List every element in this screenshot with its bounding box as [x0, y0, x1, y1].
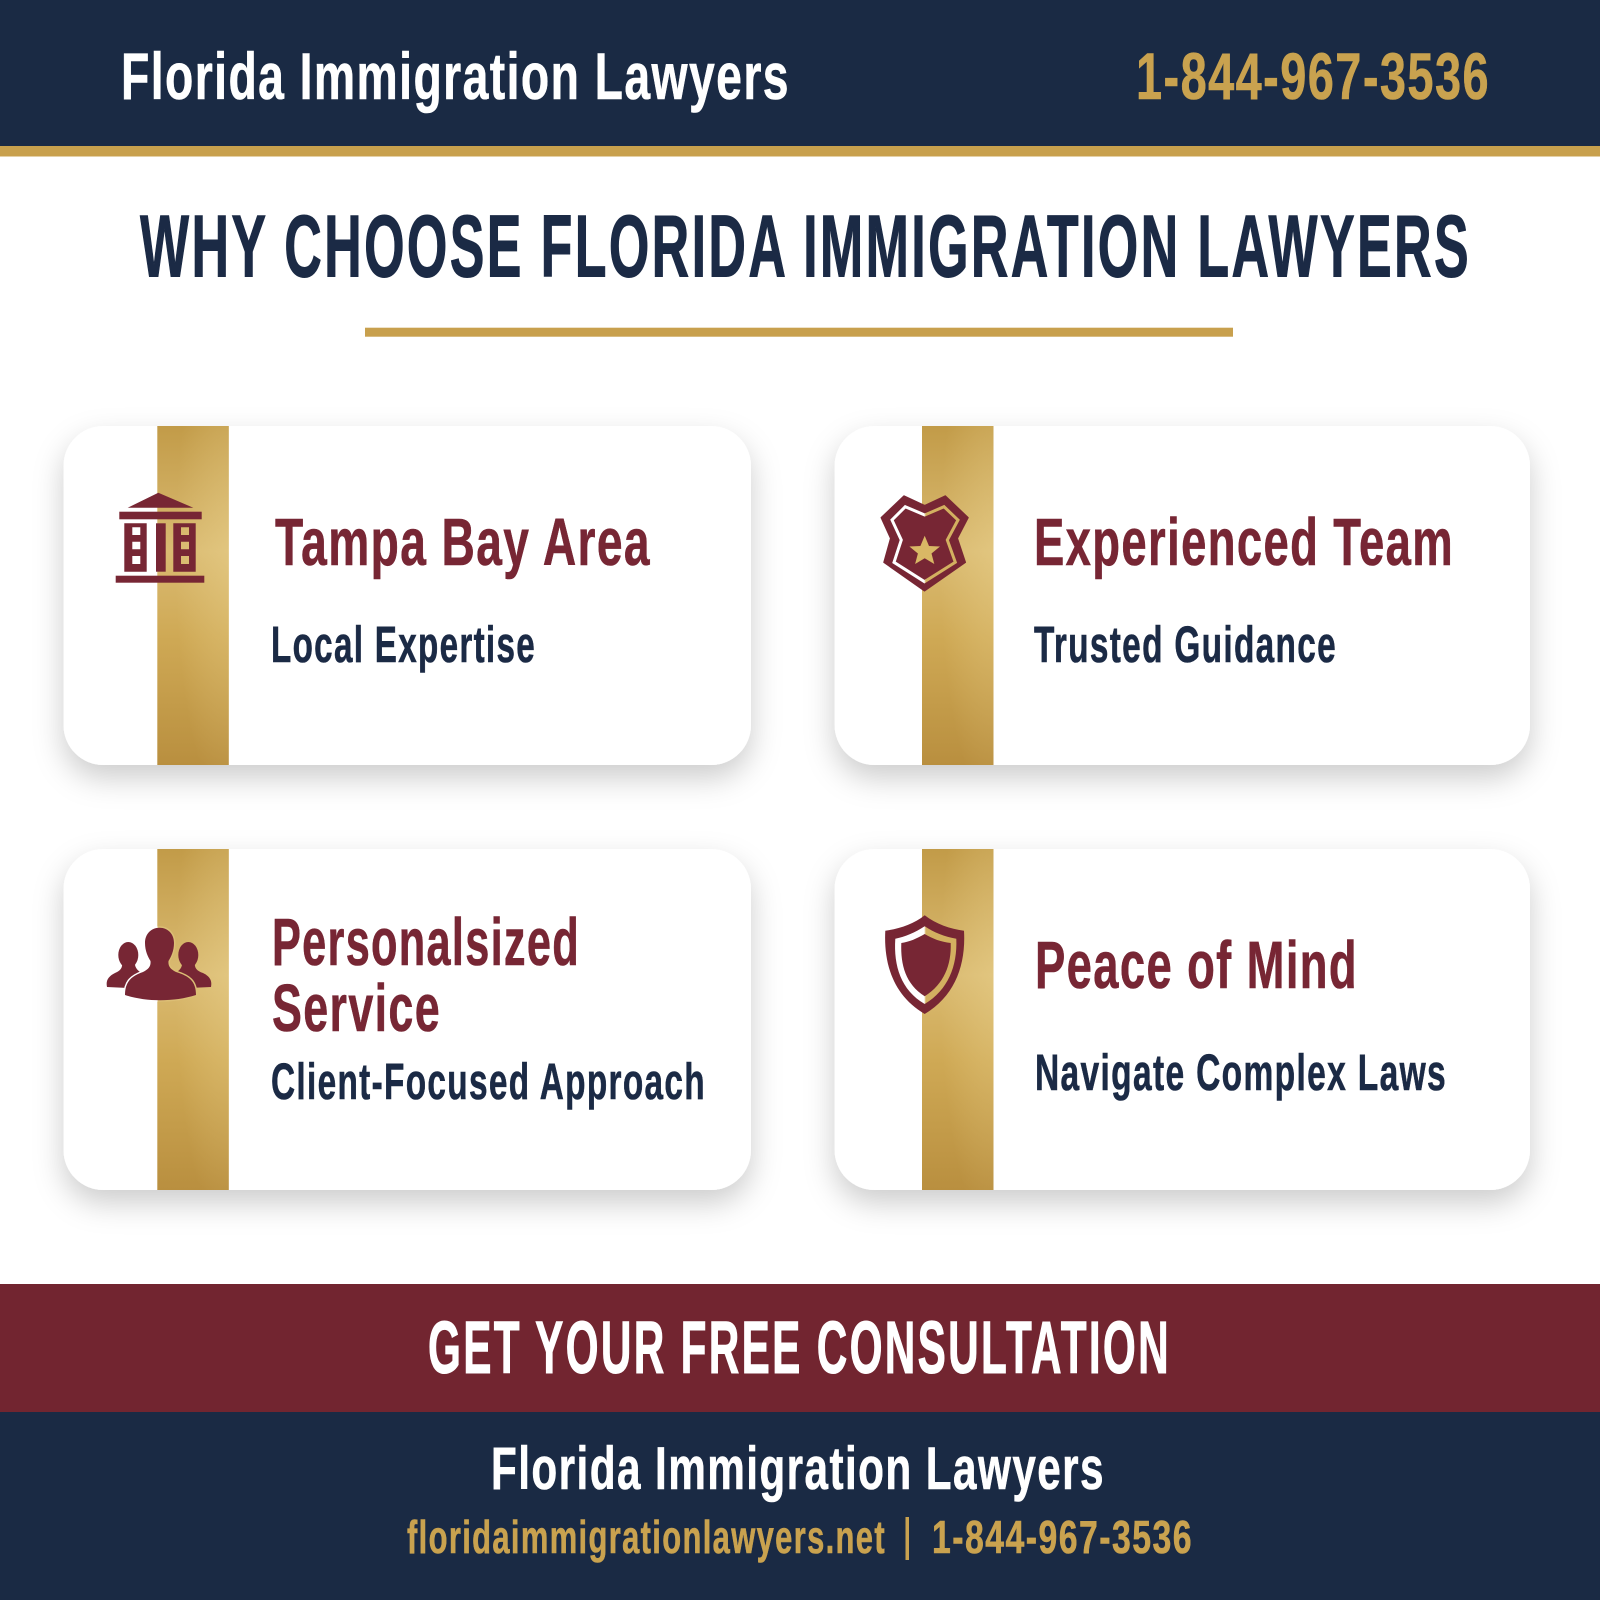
- footer: [0, 1412, 1600, 1600]
- subtext: Trusted Guidance: Trusted Guidance: [1034, 616, 1337, 673]
- subtext: Client-Focused Approach: Client-Focused Approach: [271, 1053, 706, 1110]
- icon: courthouse: [116, 493, 204, 583]
- icon: shield: [885, 915, 964, 1014]
- panel: Peace of Mind: [835, 849, 1530, 1190]
- heading: Personalsized Service: Personalsized: [272, 905, 580, 980]
- footer website: floridaimmigrationlawyers.net: [407, 1511, 886, 1563]
- heading: Personalsized Service: Service: [272, 971, 441, 1046]
- heading: Tampa Bay Area: Tampa Bay Area: [275, 505, 651, 580]
- panel: Tampa Bay Area: [64, 426, 751, 765]
- footer phone number: 1-844-967-3536: [932, 1511, 1193, 1563]
- header firm name: Florida Immigration Lawyers: [121, 39, 790, 113]
- heading: Personalsized Service: [272, 905, 580, 1046]
- icon: group of people: [107, 928, 211, 1000]
- footer firm name: Florida Immigration Lawyers: [491, 1435, 1105, 1502]
- subtext: Local Expertise: Local Expertise: [271, 616, 536, 673]
- panel: Experienced Team: [835, 426, 1530, 765]
- icon: badge with star: [881, 496, 968, 591]
- header bar: [0, 0, 1600, 156]
- heading: Peace of Mind: Peace of Mind: [1035, 928, 1358, 1003]
- title underline: [365, 328, 1233, 337]
- footer separator: [906, 1517, 909, 1560]
- call to action banner: [0, 1284, 1600, 1412]
- panel: Personalsized Service: [64, 849, 751, 1190]
